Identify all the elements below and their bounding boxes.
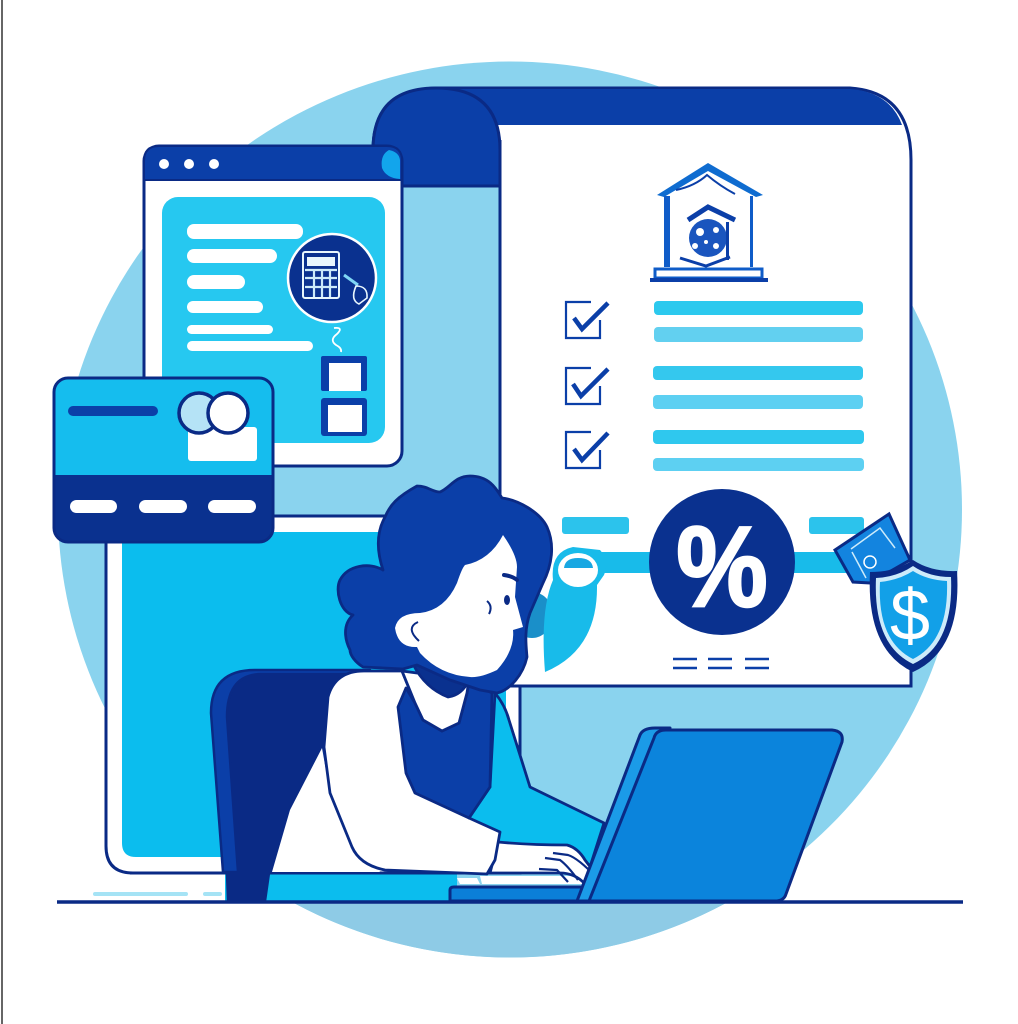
eye, brow and ear detail (412, 575, 517, 641)
far arm (469, 693, 604, 870)
calculator badge (288, 234, 376, 322)
keyboard paper (457, 876, 590, 884)
large cyan panel (106, 516, 520, 873)
footer lines (673, 659, 769, 668)
option boxes (321, 356, 367, 436)
checklist (566, 301, 864, 471)
white shirt (324, 671, 500, 874)
checkbox 3 (566, 432, 608, 468)
face (395, 535, 523, 677)
browser window (144, 146, 402, 466)
shirt gap (272, 748, 380, 872)
cyan leaf with ring (511, 547, 606, 672)
checkbox 1 (566, 302, 608, 338)
squiggle (333, 328, 341, 352)
chair (211, 670, 370, 901)
chest (402, 671, 469, 731)
window dots (159, 159, 219, 169)
card chip (188, 427, 257, 461)
credit card (54, 378, 273, 542)
percent badge: % (676, 503, 768, 630)
background circle (58, 62, 962, 958)
laptop edge (577, 728, 670, 901)
shield icon (870, 560, 957, 672)
percent badge (649, 489, 795, 635)
interest slider bar (562, 517, 864, 573)
banknote (835, 514, 910, 583)
card logo (179, 393, 248, 433)
hair (338, 476, 552, 693)
laptop base (450, 887, 590, 901)
neck shadow (413, 664, 480, 697)
house icon (650, 163, 768, 282)
laptop (450, 728, 842, 901)
hand (490, 842, 598, 884)
desk surface (93, 873, 490, 901)
checkbox 2 (566, 368, 608, 404)
laptop screen (589, 730, 842, 901)
text bars 1 (654, 301, 863, 342)
vest (398, 680, 492, 818)
card stripe (68, 406, 158, 416)
window tab (382, 150, 400, 179)
shield icon: $ (890, 576, 930, 656)
card number dashes (70, 500, 256, 513)
text lines (187, 224, 313, 351)
main document (373, 88, 911, 686)
content panel (162, 197, 385, 443)
text bars 3 (653, 430, 864, 471)
person (272, 476, 604, 884)
ground line (57, 900, 963, 904)
text bars 2 (653, 366, 863, 409)
